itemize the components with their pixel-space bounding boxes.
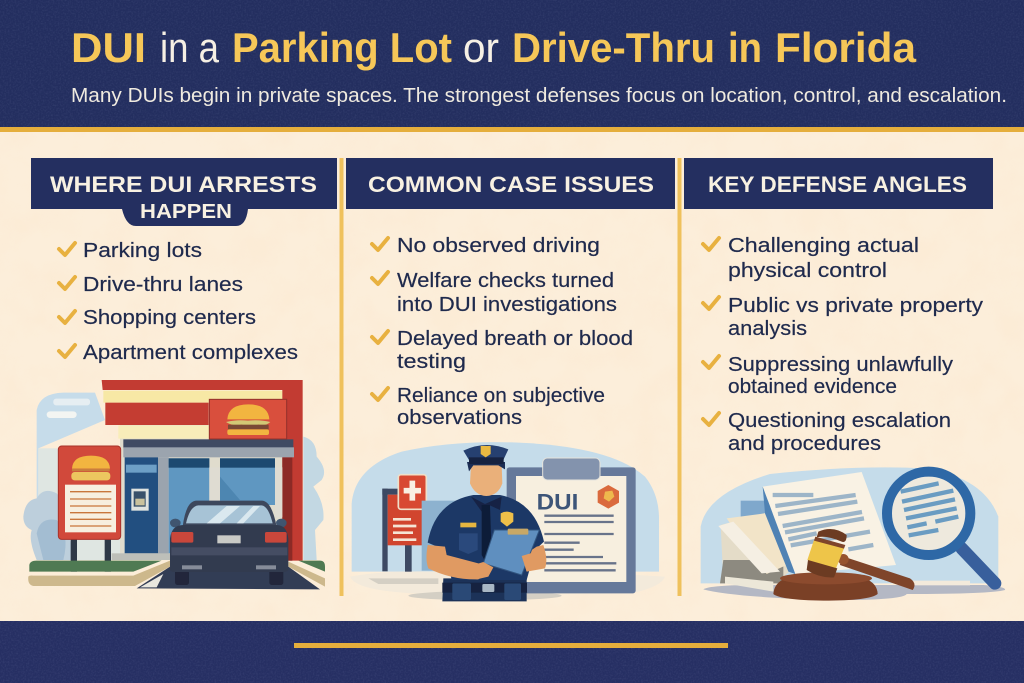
heading: key defense angles: KEY DEFENSE ANGLES	[708, 172, 967, 197]
header banner	[0, 0, 1024, 132]
title: Drive-Thru	[512, 24, 715, 71]
checklist: locations: Shopping centers	[83, 306, 256, 329]
illustration: gavel, documents and magnifying glass	[701, 467, 1005, 601]
DUI clipboard	[507, 458, 636, 593]
officer	[426, 445, 546, 601]
checklist: defense angles: and procedures	[728, 432, 881, 455]
checklist: case issues: No observed driving	[397, 234, 600, 257]
checklist: defense angles: Public vs private property	[728, 294, 984, 317]
illustration: police officer with DUI report	[350, 442, 665, 601]
checklist: defense angles: Questioning escalation	[728, 409, 951, 432]
checklist: defense angles: Challenging actual	[728, 234, 919, 257]
checklist: case issues: into DUI investigations	[397, 293, 617, 316]
checklist: case issues: testing	[397, 350, 466, 373]
lawn and curb	[29, 561, 162, 572]
title: in a	[160, 24, 220, 71]
checklist: case issues: observations	[397, 406, 522, 429]
heading: common case issues	[346, 158, 675, 209]
panel: common case issues	[346, 158, 675, 601]
panel: where DUI arrests happen	[23, 158, 337, 589]
checklist: case issues: Welfare checks turned	[397, 269, 614, 292]
footer gold rule	[294, 643, 728, 648]
checklist: case issues	[372, 234, 633, 429]
checklist: defense angles: Suppressing unlawfully	[728, 353, 954, 376]
heading: where DUI arrests happen: HAPPEN	[140, 201, 232, 223]
paper stack	[718, 501, 792, 592]
panel: key defense angles	[684, 158, 1005, 601]
checklist: locations: Parking lots	[83, 239, 202, 262]
checklist: defense angles: analysis	[728, 317, 807, 340]
checklist: locations: Drive-thru lanes	[83, 273, 243, 296]
column dividers	[340, 158, 682, 596]
heading: where DUI arrests happen: WHERE DUI ARRESTS	[50, 172, 317, 197]
checklist: defense angles: physical control	[728, 259, 887, 282]
title: DUI	[71, 24, 146, 71]
DUI clipboard: DUI	[537, 490, 578, 515]
hospital sign	[382, 475, 426, 572]
title: Florida	[775, 24, 917, 71]
title	[71, 24, 917, 71]
checklist: case issues: Reliance on subjective	[397, 384, 605, 407]
checklist: defense angles	[703, 234, 984, 455]
subtitle: Many DUIs begin in private spaces. The strongest defenses focus on location, control, and escalation.	[71, 85, 1007, 107]
title: or	[463, 24, 499, 71]
checklist: locations: Apartment complexes	[83, 341, 298, 364]
roof sign with burger	[209, 399, 287, 439]
checklist: locations	[59, 239, 298, 364]
main document	[763, 472, 896, 574]
gavel	[773, 529, 914, 601]
title: in	[728, 24, 762, 71]
magnifying glass	[887, 472, 995, 583]
menu board	[58, 446, 121, 572]
illustration: drive-thru restaurant	[23, 380, 325, 589]
title: Parking Lot	[232, 24, 452, 71]
footer band	[0, 621, 1024, 683]
car	[170, 501, 288, 585]
heading: common case issues: COMMON CASE ISSUES	[368, 172, 654, 197]
checklist: defense angles: obtained evidence	[728, 375, 897, 398]
heading: where DUI arrests happen	[31, 158, 337, 226]
heading: key defense angles	[684, 158, 993, 209]
checklist: case issues: Delayed breath or blood	[397, 327, 633, 350]
